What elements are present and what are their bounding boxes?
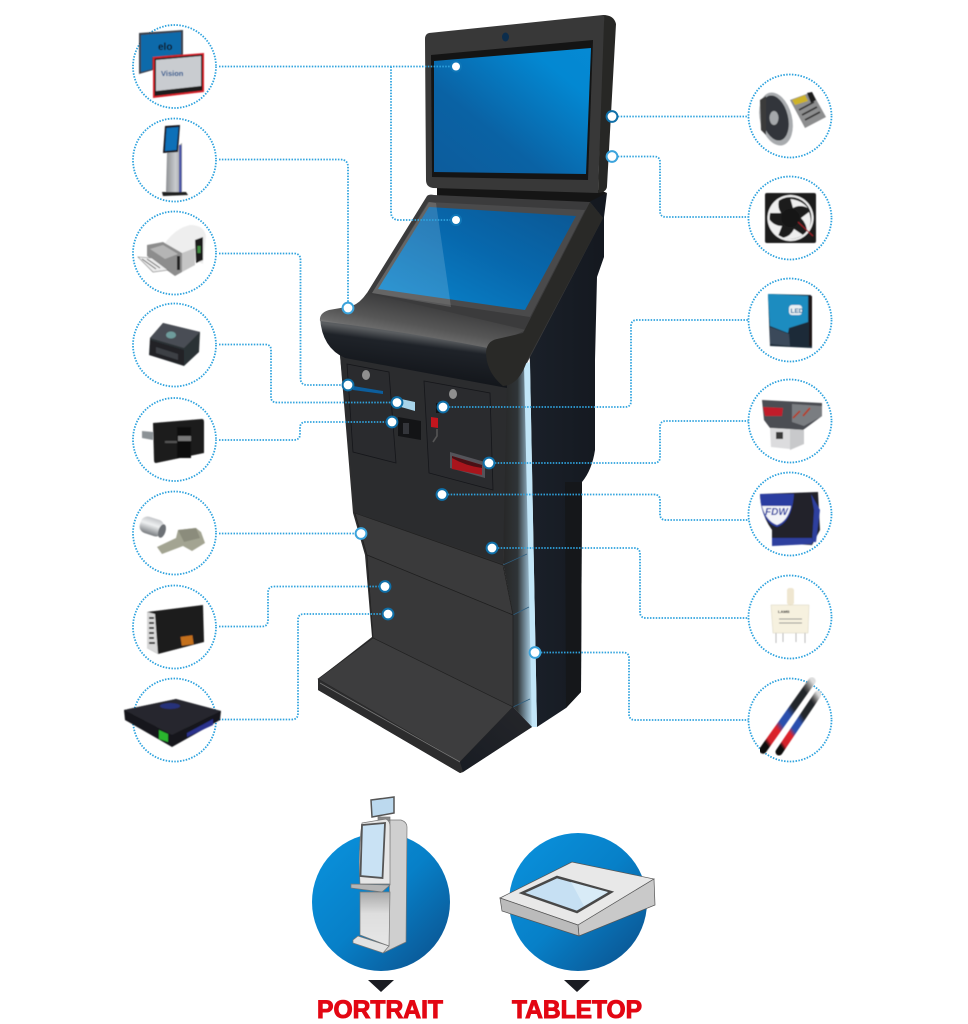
icon: barcode scanner <box>149 323 200 366</box>
tabletop cabinet icon <box>500 862 655 936</box>
component circles <box>133 25 832 762</box>
key latch <box>433 429 437 442</box>
portrait cabinet icon <box>351 797 407 953</box>
icon: touch monitors: Vision <box>161 69 184 78</box>
base right wedge <box>460 707 532 772</box>
tabletop option <box>500 833 655 1024</box>
console shelf top <box>320 293 526 348</box>
right door <box>424 381 493 490</box>
icon: cooling fan <box>765 193 816 243</box>
icon: coin hopper: FDW <box>765 507 789 518</box>
left door lock <box>362 370 370 380</box>
top screen side <box>598 15 616 193</box>
glow strip shading <box>503 362 532 727</box>
bill bezel red <box>450 452 485 478</box>
lower screen <box>378 207 576 310</box>
portrait pointer <box>368 980 394 992</box>
tabletop label: TABLETOP <box>512 996 642 1024</box>
kiosk lower front body <box>318 355 532 773</box>
camera <box>502 32 509 42</box>
top screen housing <box>425 15 604 193</box>
icon: card reader bezel <box>142 419 204 463</box>
portrait blue circle <box>312 833 450 971</box>
top screen bezel <box>431 40 593 180</box>
kiosk illustration <box>318 15 616 773</box>
left door <box>347 364 396 463</box>
red button <box>431 417 438 428</box>
card slot blue <box>353 386 383 394</box>
icon: lamp push button: LAMB <box>778 609 790 614</box>
tabletop pointer <box>564 980 590 992</box>
housing right flank <box>486 202 603 386</box>
side shadow panel <box>565 482 582 708</box>
console shelf lower <box>320 318 507 388</box>
icon: media player box <box>124 699 221 747</box>
light strip <box>524 362 537 727</box>
portrait label: PORTRAIT <box>317 996 443 1024</box>
tabletop blue circle <box>509 833 647 971</box>
icon: touch monitors: elo <box>158 42 172 53</box>
lower screen bezel <box>372 202 585 317</box>
icon: coin validator: LED <box>790 308 804 315</box>
dotted connector lines <box>219 66 750 720</box>
upper front panel dark <box>340 355 507 563</box>
coin slot <box>436 403 443 413</box>
card reader <box>398 417 421 440</box>
icon: LED tubes <box>763 681 818 752</box>
right door lock <box>449 389 457 399</box>
portrait option <box>312 797 450 1024</box>
base top <box>318 638 513 762</box>
kiosk right side body <box>528 193 607 727</box>
icon: coin validator <box>768 294 812 348</box>
icon: lock and keys <box>138 515 205 554</box>
middle panel <box>355 513 513 615</box>
upper cabinet neck <box>437 187 607 204</box>
lower screen glare <box>372 202 451 307</box>
icon: coin hopper <box>760 492 820 546</box>
icon: ticket printer <box>138 225 206 276</box>
upper panel seam <box>503 554 530 707</box>
lower panel <box>367 555 513 707</box>
lower screen housing <box>358 195 603 363</box>
icon: kiosk stand <box>162 125 188 196</box>
ticket window <box>401 399 415 411</box>
icon: bill acceptor <box>762 400 822 450</box>
base front edge <box>318 679 463 773</box>
icon: touch monitors <box>139 30 204 98</box>
callout nodes <box>343 62 617 658</box>
icon: speaker and amplifier <box>754 89 826 149</box>
icon: lamp push button <box>771 588 809 643</box>
icon: power supply <box>147 605 204 654</box>
top screen <box>434 48 591 174</box>
